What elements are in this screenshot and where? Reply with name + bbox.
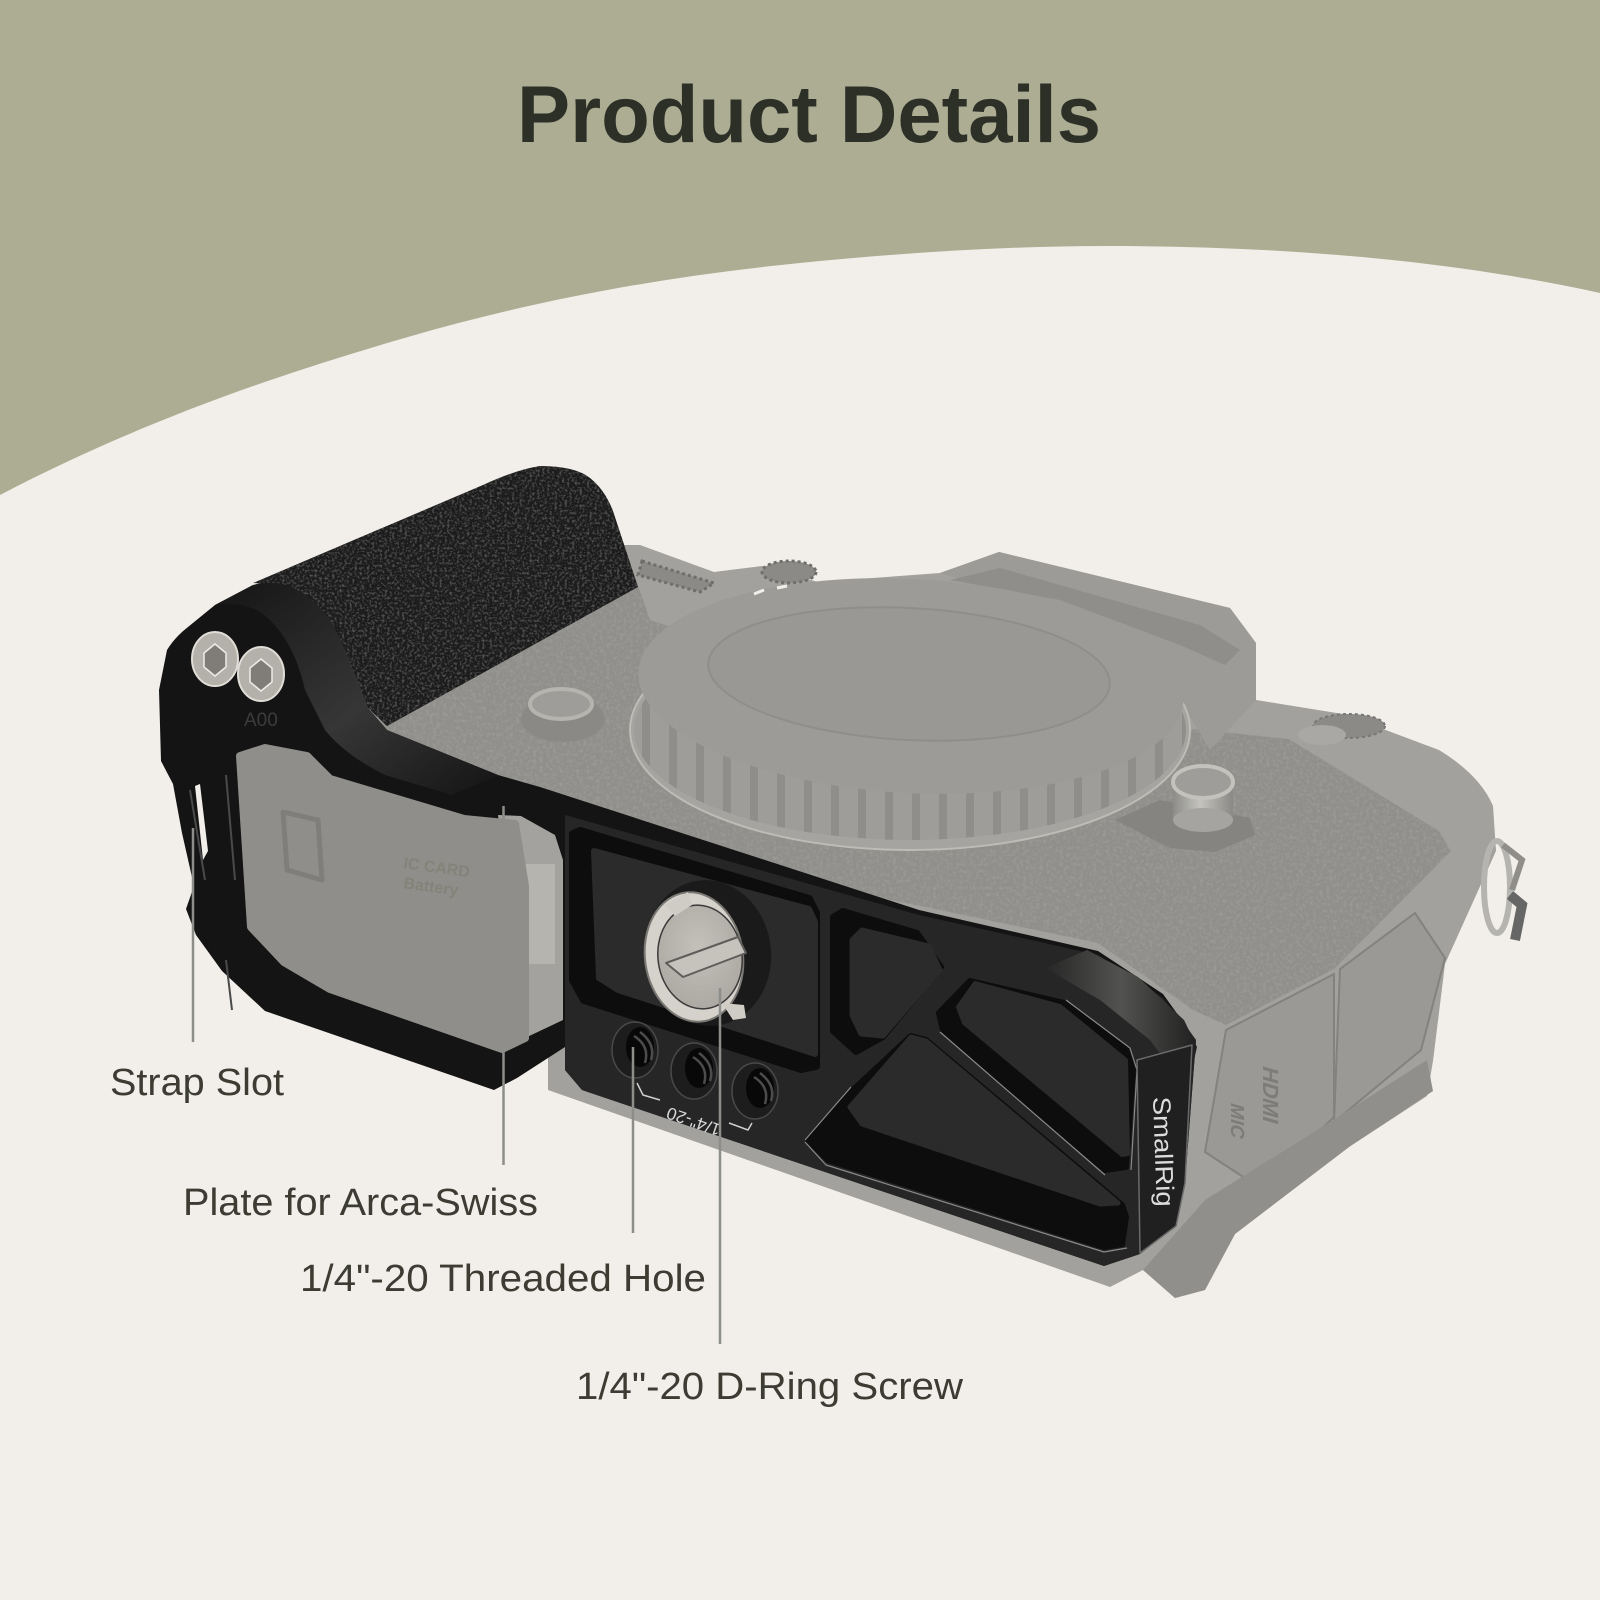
battery door: Battery <box>402 875 460 900</box>
main plate recess <box>573 831 816 1069</box>
product illustration: camera with cage <box>159 466 1522 1298</box>
callout: plate for arca-swiss: Plate for Arca-Swiss <box>183 1182 538 1224</box>
ghosted camera body <box>368 545 1522 1298</box>
hex screws <box>192 632 284 701</box>
small pocket <box>833 911 941 1052</box>
battery door: IC CARD <box>402 855 471 881</box>
hot shoe <box>940 552 1256 750</box>
battery door <box>240 748 563 1049</box>
body cap <box>630 565 1190 850</box>
engraved hole label: 1/4"-20 <box>664 1103 723 1139</box>
right pocket <box>939 981 1133 1170</box>
port labels: HDMI <box>1258 1064 1283 1127</box>
lens release button left <box>521 689 605 742</box>
raised plate surface <box>594 851 815 1054</box>
arca-swiss plate details <box>565 815 1197 1266</box>
callout: strap slot: Strap Slot <box>110 1062 284 1104</box>
end face <box>1137 1045 1192 1253</box>
d-ring screw <box>635 872 781 1034</box>
bevel highlight <box>1045 950 1197 1090</box>
cage frame <box>159 583 1196 1266</box>
engraved hole label <box>637 1083 752 1139</box>
lens release button right <box>1115 766 1255 852</box>
triangular pocket <box>808 1036 1126 1247</box>
smallrig logo: SmallRig <box>1147 1096 1179 1207</box>
cage head bevel <box>215 583 498 795</box>
top dials <box>638 561 1385 745</box>
port labels: MIC <box>1226 1101 1248 1142</box>
plate face <box>565 815 1196 1266</box>
engraved mark: A00 <box>244 710 278 731</box>
grip rubber <box>253 466 638 726</box>
threaded holes <box>612 1022 778 1119</box>
callout: threaded hole: 1/4"-20 Threaded Hole <box>300 1258 706 1300</box>
port labels <box>1226 1064 1283 1142</box>
strap lug <box>1484 841 1522 940</box>
title: Product Details <box>517 70 1101 160</box>
header curved band <box>0 0 1600 495</box>
callout: d-ring screw: 1/4"-20 D-Ring Screw <box>576 1366 964 1408</box>
strap slot opening <box>195 784 208 860</box>
